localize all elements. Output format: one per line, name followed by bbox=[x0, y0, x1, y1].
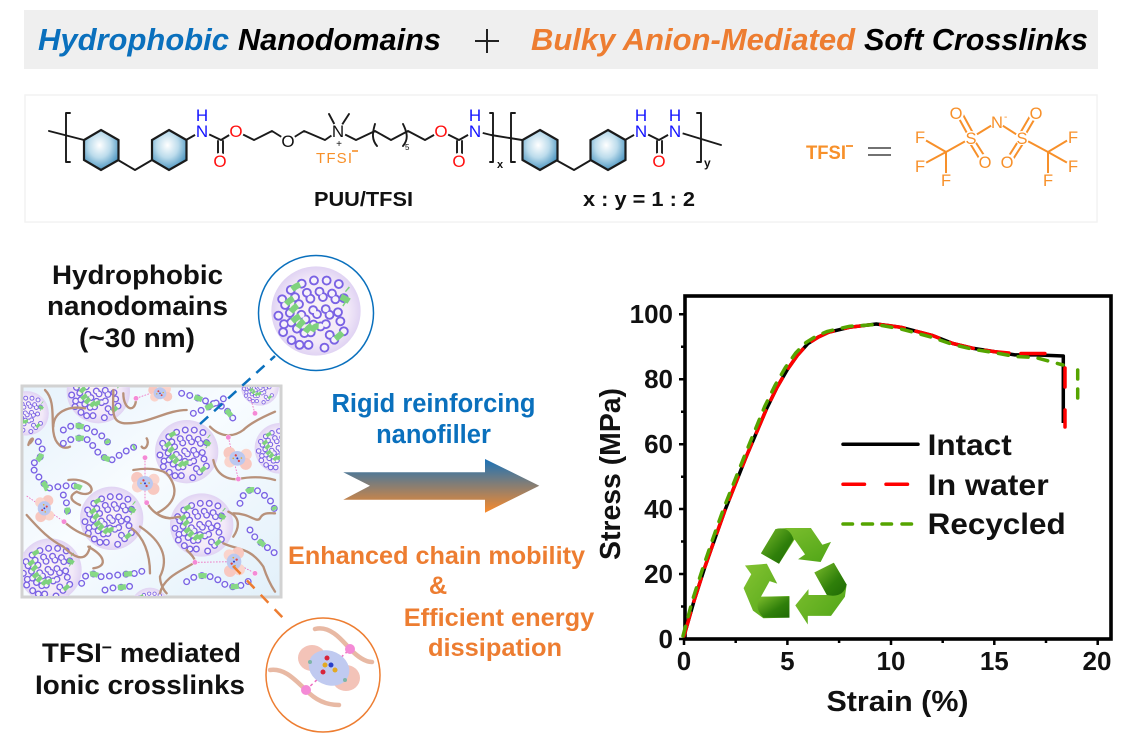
TFSI molecule: O bbox=[950, 105, 963, 123]
PUU chemical backbone: H bbox=[196, 106, 208, 125]
icon: recycle symbol bbox=[744, 528, 847, 625]
nanodomains bbox=[5, 360, 305, 626]
x tick labels: 0 bbox=[677, 646, 691, 676]
x tick labels: 15 bbox=[980, 646, 1009, 676]
curve: recycled bbox=[683, 324, 1078, 636]
y tick labels: 80 bbox=[644, 364, 673, 394]
TFSI molecule: F bbox=[1043, 172, 1053, 190]
panel: polymer structure bbox=[25, 95, 1097, 222]
x axis title: Strain (%) bbox=[826, 686, 968, 718]
TFSI molecule: O bbox=[1030, 105, 1043, 123]
y axis title: Stress (MPa) bbox=[595, 388, 627, 560]
TFSI molecule: F bbox=[1068, 129, 1078, 147]
TFSI molecule: - bbox=[1004, 112, 1007, 123]
title banner bbox=[24, 10, 1098, 69]
title: soft crosslinks: Soft Crosslinks bbox=[864, 23, 1088, 57]
TFSI molecule: O bbox=[1001, 154, 1014, 172]
PUU chemical backbone: N bbox=[196, 122, 208, 141]
PUU chemical backbone: O bbox=[213, 152, 227, 171]
TFSI molecule: N bbox=[991, 114, 1003, 132]
legend bbox=[843, 429, 1066, 541]
text: enhanced chain mobility bbox=[288, 542, 594, 662]
PUU chemical backbone: N bbox=[469, 122, 481, 141]
panel: network schematic bbox=[20, 384, 282, 598]
PUU chemical backbone: O bbox=[652, 152, 666, 171]
x tick labels bbox=[677, 646, 1111, 676]
text: rigid reinforcing bbox=[332, 390, 536, 449]
PUU chemical backbone: H bbox=[635, 106, 647, 125]
TFSI molecule: S bbox=[1016, 130, 1028, 148]
x tick labels: 20 bbox=[1083, 646, 1111, 676]
text: enhanced chain mobility: & bbox=[429, 572, 447, 600]
rigid chains bbox=[33, 393, 275, 590]
heading: TFSI mediated ionic crosslinks: − bbox=[102, 638, 112, 657]
y tick labels: 60 bbox=[644, 429, 673, 459]
PUU chemical backbone: + bbox=[336, 139, 342, 150]
TFSI molecule: S bbox=[965, 130, 977, 148]
PUU chemical backbone: y bbox=[704, 156, 711, 170]
heading: hydrophobic nanodomains: nanodomains bbox=[47, 291, 228, 321]
TFSI molecule: F bbox=[941, 172, 951, 190]
y tick labels: 0 bbox=[659, 624, 673, 654]
TFSI molecule: O bbox=[979, 154, 992, 172]
heading: TFSI mediated ionic crosslinks: Ionic crosslinks bbox=[35, 670, 245, 700]
text: enhanced chain mobility: dissipation bbox=[428, 634, 562, 662]
callout: ionic crosslink inset bbox=[266, 618, 380, 732]
y tick labels bbox=[630, 299, 673, 654]
PUU chemical backbone: H bbox=[669, 106, 681, 125]
heading: hydrophobic nanodomains bbox=[47, 260, 228, 353]
text: rigid reinforcing: nanofiller bbox=[376, 421, 491, 449]
PUU chemical backbone: O bbox=[281, 132, 295, 151]
text: enhanced chain mobility: Efficient energy bbox=[404, 604, 594, 632]
soft chains bbox=[27, 390, 275, 593]
title: plus sign bbox=[475, 29, 499, 53]
label: PUU/TFSI: PUU/TFSI bbox=[314, 188, 413, 211]
heading: TFSI mediated ionic crosslinks: TFSI bbox=[42, 638, 99, 668]
PUU chemical backbone: O bbox=[452, 152, 466, 171]
heading: hydrophobic nanodomains: Hydrophobic bbox=[52, 260, 223, 290]
text: enhanced chain mobility: Enhanced chain mobility bbox=[288, 542, 585, 570]
x tick labels: 10 bbox=[877, 646, 905, 676]
leader line: nanodomain bbox=[200, 356, 275, 424]
PUU chemical backbone: TFSI bbox=[316, 150, 352, 167]
PUU chemical backbone: N bbox=[669, 122, 681, 141]
arrow bbox=[343, 459, 539, 513]
y tick labels: 20 bbox=[644, 559, 673, 589]
heading: TFSI mediated ionic crosslinks: mediated bbox=[112, 638, 241, 668]
TFSI equals label: TFSI bbox=[806, 142, 846, 164]
text: rigid reinforcing: Rigid reinforcing bbox=[332, 390, 536, 418]
TFSI molecule bbox=[913, 105, 1080, 190]
legend: Recycled bbox=[928, 508, 1066, 541]
y tick labels: 40 bbox=[644, 494, 673, 524]
heading: TFSI mediated ionic crosslinks bbox=[35, 638, 245, 700]
y tick labels: 100 bbox=[630, 299, 673, 329]
callout: nanodomain inset bbox=[258, 256, 374, 370]
leader line: ionic crosslink bbox=[233, 566, 285, 620]
title: nanodomains: Nanodomains bbox=[238, 23, 441, 57]
PUU chemical backbone: N bbox=[635, 122, 647, 141]
TFSI molecule: F bbox=[915, 158, 925, 176]
heading: hydrophobic nanodomains: (~30 nm) bbox=[79, 323, 195, 353]
title: bulky anion term: Bulky Anion-Mediated bbox=[531, 23, 856, 57]
TFSI molecule: F bbox=[1068, 158, 1078, 176]
PUU chemical backbone: N bbox=[332, 122, 344, 141]
PUU chemical backbone: O bbox=[434, 122, 448, 141]
title: hydrophobic term: Hydrophobic bbox=[38, 23, 229, 57]
plot frame and ticks bbox=[679, 296, 1111, 645]
PUU chemical backbone bbox=[49, 106, 721, 171]
curve: intact bbox=[684, 324, 1063, 636]
TFSI molecule: F bbox=[915, 129, 925, 147]
PUU chemical backbone: O bbox=[229, 122, 243, 141]
legend: Intact bbox=[928, 429, 1012, 462]
legend: In water bbox=[928, 469, 1049, 502]
chart: stress-strain bbox=[595, 296, 1111, 718]
PUU chemical backbone: 5 bbox=[405, 143, 410, 152]
ionic crosslinks bbox=[27, 385, 258, 577]
PUU chemical backbone: x bbox=[497, 159, 504, 171]
x tick labels: 5 bbox=[780, 646, 795, 676]
label: ratio: x : y = 1 : 2 bbox=[583, 188, 695, 211]
curve: in water bbox=[684, 324, 1065, 636]
TFSI equals label bbox=[806, 142, 891, 164]
PUU chemical backbone: H bbox=[469, 106, 481, 125]
